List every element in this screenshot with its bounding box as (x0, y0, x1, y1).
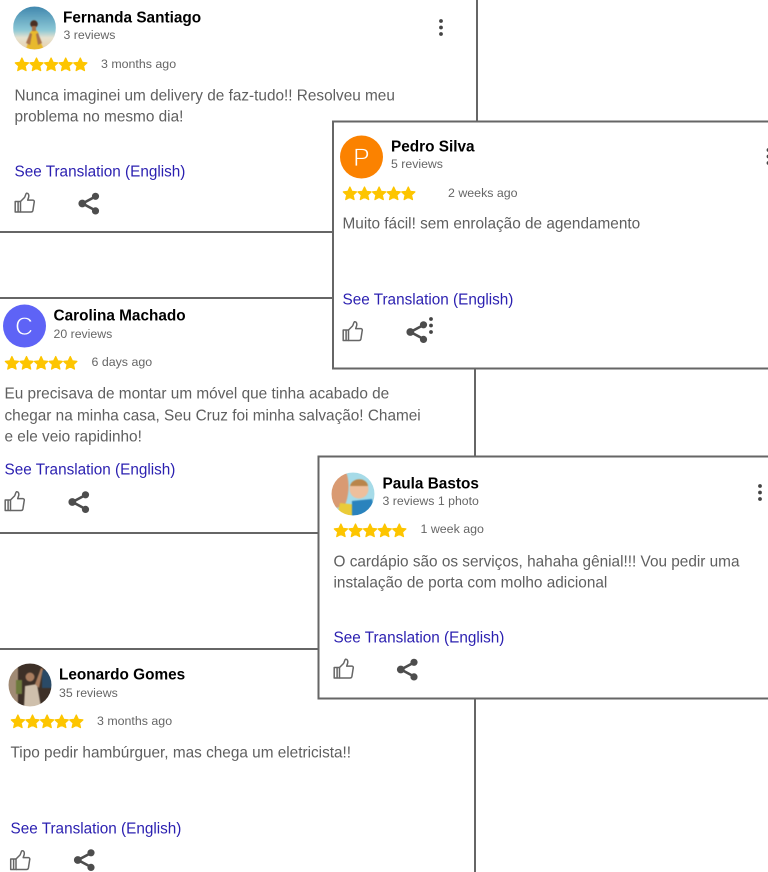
panel: review by Carolina Machado (0, 298, 475, 533)
review text: Eu precisava de montar um móvel que tinha acabado de (4, 386, 389, 403)
icon: Leonardo avatar (8, 663, 52, 707)
icon: Pedro avatar (340, 136, 383, 178)
review date: 3 months ago (101, 57, 176, 71)
icon: like (5, 492, 24, 510)
star rating (343, 187, 415, 200)
reviewer name: Paula Bastos (382, 476, 479, 492)
icon: like (15, 193, 34, 212)
review text: e ele veio rapidinho! (4, 429, 142, 446)
icon: share (68, 491, 89, 513)
review text: Muito fácil! sem enrolação de agendamento (342, 216, 640, 233)
reviewer name: Leonardo Gomes (59, 666, 185, 684)
review text: problema no mesmo dia! (14, 109, 183, 126)
icon: Pedro avatar: P (353, 144, 370, 172)
star rating (334, 524, 406, 537)
review count: 3 reviews 1 photo (382, 494, 479, 508)
icon: Carolina menu dots (429, 317, 433, 334)
translation link: See Translation (English) (14, 164, 185, 180)
icon: menu dots (767, 148, 768, 165)
review text: instalação de porta com molho adicional (334, 575, 607, 592)
icon: Fernanda avatar (13, 6, 56, 50)
review count: 35 reviews (59, 686, 118, 700)
reviewer name: Carolina Machado (54, 308, 186, 324)
icon: like (11, 851, 30, 870)
review date: 1 week ago (420, 522, 484, 536)
panel: review by Leonardo Gomes (0, 649, 475, 872)
icon: share (406, 321, 427, 343)
icon: like (334, 659, 353, 678)
review text: Tipo pedir hambúrguer, mas chega um eletricista!! (10, 745, 351, 762)
review date: 6 days ago (92, 355, 152, 369)
review count: 3 reviews (64, 28, 115, 42)
star rating (11, 715, 83, 728)
panel: review by Pedro Silva (333, 122, 768, 368)
review text: Nunca imaginei um delivery de faz-tudo!! Resolveu meu (14, 88, 395, 105)
icon: menu dots (439, 19, 443, 36)
icon: menu dots (758, 484, 762, 501)
reviewer name: Pedro Silva (391, 138, 475, 156)
icon: like (343, 322, 362, 340)
review date: 3 months ago (97, 714, 172, 728)
icon: Carolina avatar (3, 304, 46, 348)
review text: O cardápio são os serviços, hahaha gênial!!! Vou pedir uma (334, 554, 740, 571)
review count: 20 reviews (54, 327, 112, 341)
review text: chegar na minha casa, Seu Cruz foi minha salvação! Chamei (4, 408, 421, 425)
panel: review by Fernanda Santiago (0, 0, 477, 232)
icon: share (397, 659, 418, 680)
icon: share (74, 849, 95, 871)
translation link: See Translation (English) (342, 292, 513, 308)
panel: review by Paula Bastos (318, 456, 768, 698)
star rating (15, 58, 87, 71)
review count: 5 reviews (391, 157, 443, 171)
review date: 2 weeks ago (448, 186, 518, 200)
icon: share (78, 193, 99, 214)
icon: Carolina avatar: C (15, 313, 33, 341)
translation link: See Translation (English) (10, 820, 181, 838)
translation link: See Translation (English) (4, 462, 175, 478)
reviewer name: Fernanda Santiago (63, 10, 201, 26)
translation link: See Translation (English) (334, 630, 504, 646)
star rating (5, 356, 77, 369)
icon: Paula avatar (331, 472, 375, 516)
